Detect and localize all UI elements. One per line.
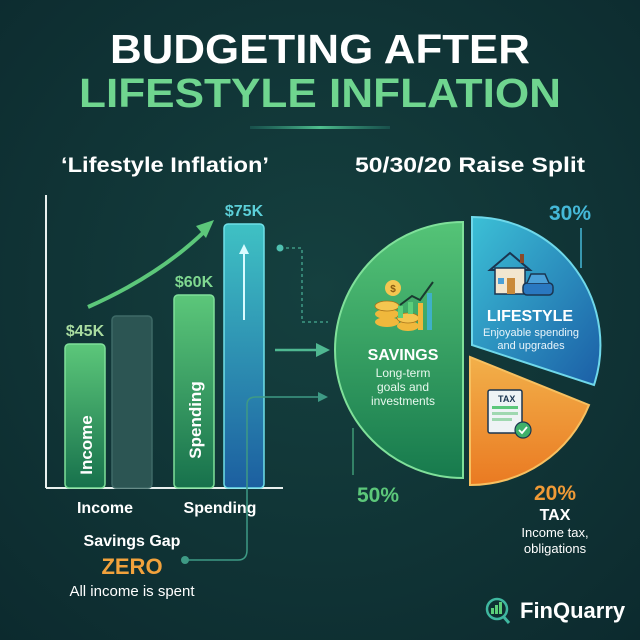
title bbox=[79, 26, 561, 116]
arrow: growth bbox=[88, 220, 214, 307]
savings gap text: ZERO bbox=[101, 554, 163, 579]
icon: coins: $ bbox=[390, 284, 396, 295]
pie chart: goals and bbox=[377, 380, 429, 394]
bar chart: Income bbox=[77, 500, 133, 517]
savings gap text: All income is spent bbox=[69, 583, 195, 600]
tax description: Income tax, bbox=[521, 525, 589, 540]
bar chart: $75K bbox=[225, 203, 264, 220]
percentage labels: 20% bbox=[534, 482, 576, 505]
percentage labels: 50% bbox=[357, 484, 399, 507]
heading: lifestyle inflation: ‘Lifestyle Inflation’ bbox=[61, 154, 269, 177]
heading: raise split: 50/30/20 Raise Split bbox=[355, 154, 585, 177]
pie chart: and upgrades bbox=[497, 340, 565, 352]
title: LIFESTYLE INFLATION bbox=[79, 70, 561, 116]
pie chart: investments bbox=[371, 394, 435, 408]
icon: tax document bbox=[488, 390, 531, 438]
tax description: obligations bbox=[524, 541, 587, 556]
connectors bbox=[185, 248, 328, 560]
icon: coins bbox=[375, 280, 433, 331]
icon: house and car bbox=[490, 253, 553, 295]
bar chart bbox=[46, 195, 283, 517]
pie chart: SAVINGS bbox=[368, 347, 439, 364]
bar chart: Spending bbox=[186, 381, 205, 459]
title: BUDGETING AFTER bbox=[110, 26, 530, 72]
savings gap text: Savings Gap bbox=[84, 533, 181, 550]
pie chart bbox=[335, 217, 600, 485]
pie chart: Long-term bbox=[376, 366, 430, 380]
bar chart: Spending bbox=[184, 500, 256, 517]
bar chart: Income bbox=[77, 415, 96, 475]
logo: FinQuarry bbox=[520, 598, 626, 623]
tax description bbox=[521, 525, 589, 556]
icon: tax document: TAX bbox=[498, 394, 515, 404]
percentage labels bbox=[353, 202, 591, 524]
pie chart: LIFESTYLE bbox=[487, 308, 573, 325]
percentage labels: TAX bbox=[540, 507, 571, 524]
pie chart: Enjoyable spending bbox=[483, 327, 579, 339]
bar chart: $45K bbox=[66, 323, 105, 340]
savings gap text bbox=[69, 533, 195, 600]
bar chart: $60K bbox=[175, 274, 214, 291]
percentage labels: 30% bbox=[549, 202, 591, 225]
